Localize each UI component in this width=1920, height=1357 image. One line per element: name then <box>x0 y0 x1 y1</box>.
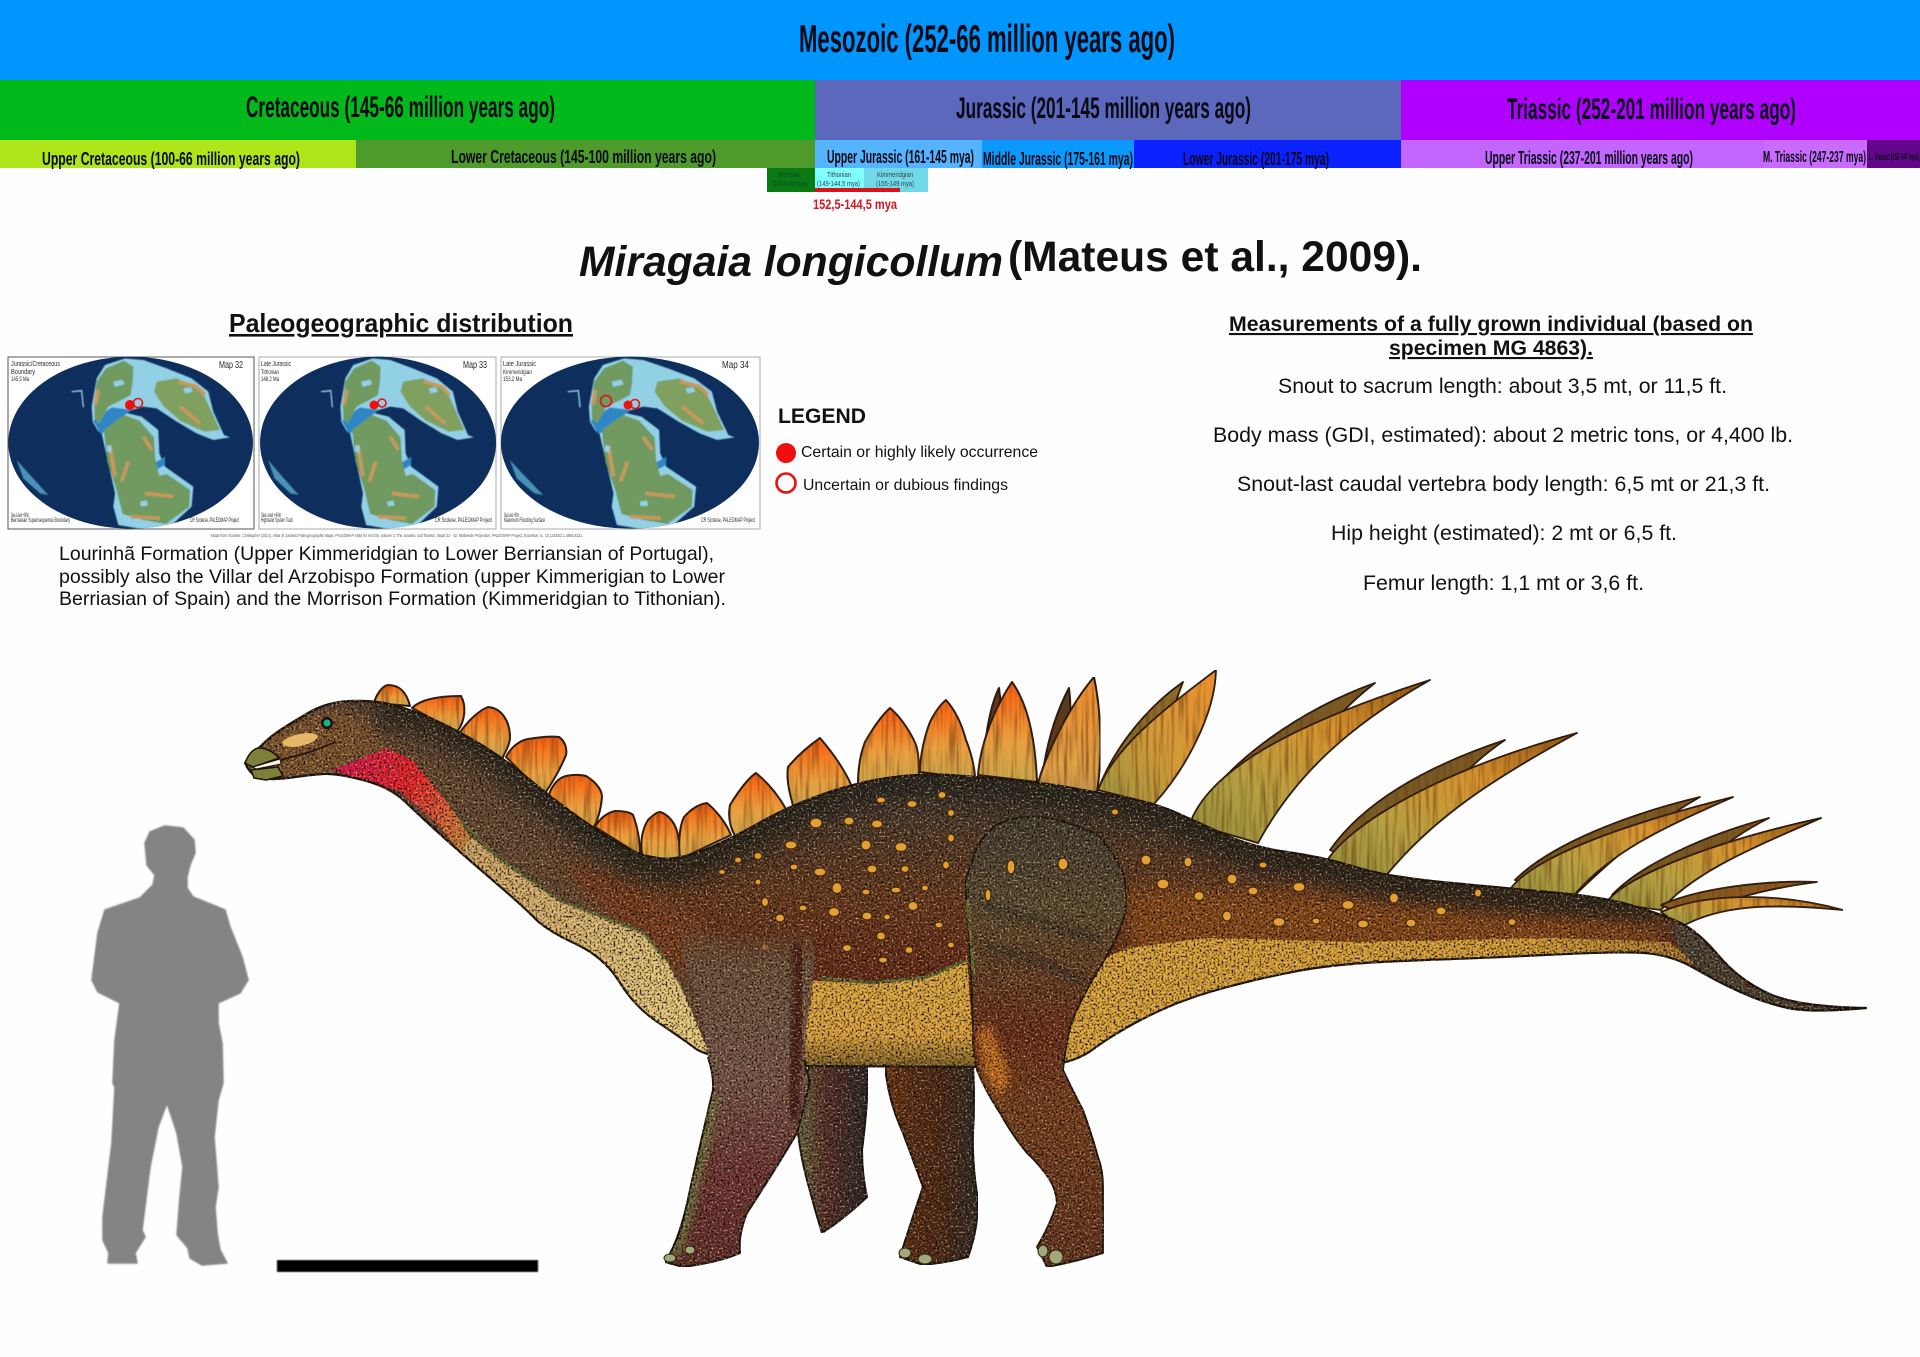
Middle Jurassic <box>982 140 1134 169</box>
Upper Cretaceous <box>0 140 356 169</box>
measurement lines: Snout-last caudal vertebra body length: 6,5 mt or 21,3 ft. <box>1237 473 1770 496</box>
belly <box>805 958 975 1070</box>
heading: paleogeographic distribution: Paleogeographic distribution <box>229 308 573 338</box>
jaw line <box>281 742 336 760</box>
tail rust flank <box>1128 890 1660 955</box>
timeline: geologic eras <box>0 0 1920 212</box>
near hind leg <box>965 817 1126 1267</box>
far hind leg <box>885 1066 978 1265</box>
body outline <box>245 701 1866 1067</box>
thigh stripes <box>985 905 1100 985</box>
belly olive seam <box>820 960 967 983</box>
tail end shading <box>1668 925 1842 1010</box>
arm shading <box>673 945 799 1255</box>
occurrence markers <box>370 399 386 410</box>
map 32: Berriasian Supersequence Boundary <box>11 518 70 524</box>
Mesozoic band <box>0 0 1920 80</box>
throat red patch <box>332 748 470 853</box>
map 34: Maximum Flooding Surface <box>504 518 545 524</box>
panel: measurements <box>1213 313 1793 595</box>
Lower Jurassic: Lower Jurassic (201-175 mya) <box>1183 149 1329 169</box>
map 32: Boundary <box>11 367 35 376</box>
measurement lines: Body mass (GDI, estimated): about 2 metric tons, or 4,400 lb. <box>1213 424 1793 447</box>
Upper Jurassic <box>815 140 982 168</box>
legend: certain occurrence: Certain or highly likely occurrence <box>801 444 1038 461</box>
map 32: 145.5 Ma <box>11 376 29 383</box>
Tithonian stage <box>815 168 864 192</box>
legend heading: LEGEND <box>778 405 866 428</box>
title: Miragaia longicollum <box>579 239 1003 286</box>
head details <box>245 717 336 780</box>
neck reddish blush <box>561 860 706 978</box>
Lower Cretaceous <box>356 140 815 168</box>
Cretaceous band <box>0 80 815 140</box>
Berriasian stage: Berriasian <box>779 170 800 179</box>
map 33: CR Scotese, PALEOMAP Project <box>435 518 492 524</box>
map 33: Late Jurassic <box>261 359 291 368</box>
Kimmeridgian stage: (155-149 mya) <box>876 179 914 188</box>
Mesozoic band: Mesozoic (252-66 million years ago) <box>799 18 1175 61</box>
mouth line <box>253 759 281 769</box>
measurements heading <box>1229 313 1753 360</box>
map 34: Sea Level +80m <box>504 513 519 519</box>
map 32: Map 32 <box>219 360 243 371</box>
Tithonian stage: Tithonian <box>827 170 851 179</box>
near front leg <box>665 900 814 1267</box>
back plates <box>374 677 1100 862</box>
body: neck, torso and tail <box>240 690 1880 1090</box>
map 34: CR Scotese, PALEOMAP Project <box>701 518 755 524</box>
Lower Triassic <box>1867 140 1920 168</box>
measurement lines: Hip height (estimated): 2 mt or 6,5 ft. <box>1331 522 1677 545</box>
map 32: CR Scotese, PALEOMAP Project <box>190 518 239 524</box>
thigh olive edge <box>967 900 973 975</box>
Berriasian stage: (144.5-140 mya) <box>773 179 807 188</box>
formations text <box>59 543 726 610</box>
occurrence markers <box>600 396 640 410</box>
Cretaceous band: Cretaceous (145-66 million years ago) <box>246 91 555 124</box>
Lower Jurassic <box>1134 140 1401 169</box>
scale bar <box>277 1260 538 1272</box>
map 32: Sea Level +80m <box>11 513 29 519</box>
neck underside <box>456 836 708 1053</box>
head and neck colour <box>280 702 706 1045</box>
map 34: Map 34 <box>722 360 749 371</box>
Kimmeridgian stage <box>864 168 928 192</box>
legend: uncertain findings: Uncertain or dubious findings <box>803 477 1008 494</box>
map 33: Tithonian <box>261 369 279 376</box>
toe claws <box>664 1245 1063 1264</box>
map 32 <box>8 357 254 530</box>
map 33: Highstand System Track <box>261 518 293 524</box>
tail spikes <box>1098 670 1843 927</box>
body base colour <box>313 702 1814 1066</box>
thigh osteoderms <box>985 858 1068 901</box>
temporal range label: 152,5-144,5 mya <box>813 196 897 212</box>
map 34: Kimmeridgian <box>503 369 532 376</box>
title <box>579 234 1422 286</box>
osteoderms <box>718 792 1516 963</box>
map 32: Jurassic/Cretaceous <box>11 359 60 368</box>
map 33: Map 33 <box>463 360 487 371</box>
measurements heading: Measurements of a fully grown individual (based on <box>1229 313 1753 336</box>
Triassic band <box>1401 80 1920 140</box>
eye <box>321 717 333 729</box>
measurement lines: Snout to sacrum length: about 3,5 mt, or 11,5 ft. <box>1278 375 1727 398</box>
map 33: Sea Level +40m <box>261 513 281 519</box>
Upper Triassic <box>1401 140 1764 168</box>
human silhouette <box>92 826 248 1265</box>
Middle Jurassic: Middle Jurassic (175-161 mya) <box>983 149 1133 169</box>
lower beak <box>251 767 283 780</box>
Kimmeridgian stage: Kimmeridgian <box>877 170 913 179</box>
Middle Triassic <box>1763 140 1867 168</box>
measurement lines <box>1213 375 1793 595</box>
nostril patch <box>281 730 319 750</box>
formations text: possibly also the Villar del Arzobispo Formation (upper Kimmerigian to Lower <box>59 566 725 588</box>
dark back shading <box>374 708 1658 921</box>
temporal range bar <box>815 188 900 192</box>
Berriasian stage <box>767 168 815 192</box>
Lower Cretaceous: Lower Cretaceous (145-100 million years ago) <box>451 146 716 167</box>
Jurassic band <box>815 80 1401 140</box>
Tithonian stage: (149-144,5 mya) <box>817 179 860 188</box>
Jurassic band: Jurassic (201-145 million years ago) <box>956 92 1251 125</box>
arm outline <box>665 1057 810 1267</box>
map 33: 148.2 Ma <box>261 376 279 383</box>
measurements heading: specimen MG 4863). <box>1389 337 1593 360</box>
map 33 <box>259 357 496 530</box>
title: (Mateus et al., 2009). <box>1008 234 1422 281</box>
occurrence markers <box>125 398 142 410</box>
upper beak <box>245 748 279 767</box>
thigh highlight <box>976 1025 1010 1100</box>
tail underside <box>1065 938 1694 1061</box>
map 34: Late Jurassic <box>503 359 536 368</box>
Upper Cretaceous: Upper Cretaceous (100-66 million years ago) <box>42 148 300 169</box>
neck olive seam <box>454 812 668 962</box>
measurement lines: Femur length: 1,1 mt or 3,6 ft. <box>1363 572 1644 595</box>
formations text: Berriasian of Spain) and the Morrison Formation (Kimmeridgian to Tithonian). <box>59 588 726 610</box>
formations text: Lourinhã Formation (Upper Kimmeridgian to Lower Berriansian of Portugal), <box>59 543 714 565</box>
map 34 <box>501 357 760 530</box>
map 34: 153.2 Ma <box>503 376 522 383</box>
far front leg <box>797 1066 868 1233</box>
map source caption: Maps from Scotese, Christopher (2014). Atlas of Jurassic Paleogeographic Maps, PALEOMAP Atlas for ArcGIS, volume 3, The Jurassic and Triassic, Maps 32 - 42, Mollweide Projection, PALEOMAP Project, Evanston, IL. 10.13140/2.1.4850.4321. <box>211 533 583 538</box>
illustration: Miragaia dinosaur <box>240 670 1880 1267</box>
Upper Triassic: Upper Triassic (237-201 million years ago) <box>1485 148 1693 168</box>
legend <box>776 405 1038 494</box>
panel: paleogeographic distribution <box>8 308 760 610</box>
Upper Jurassic: Upper Jurassic (161-145 mya) <box>827 147 974 167</box>
